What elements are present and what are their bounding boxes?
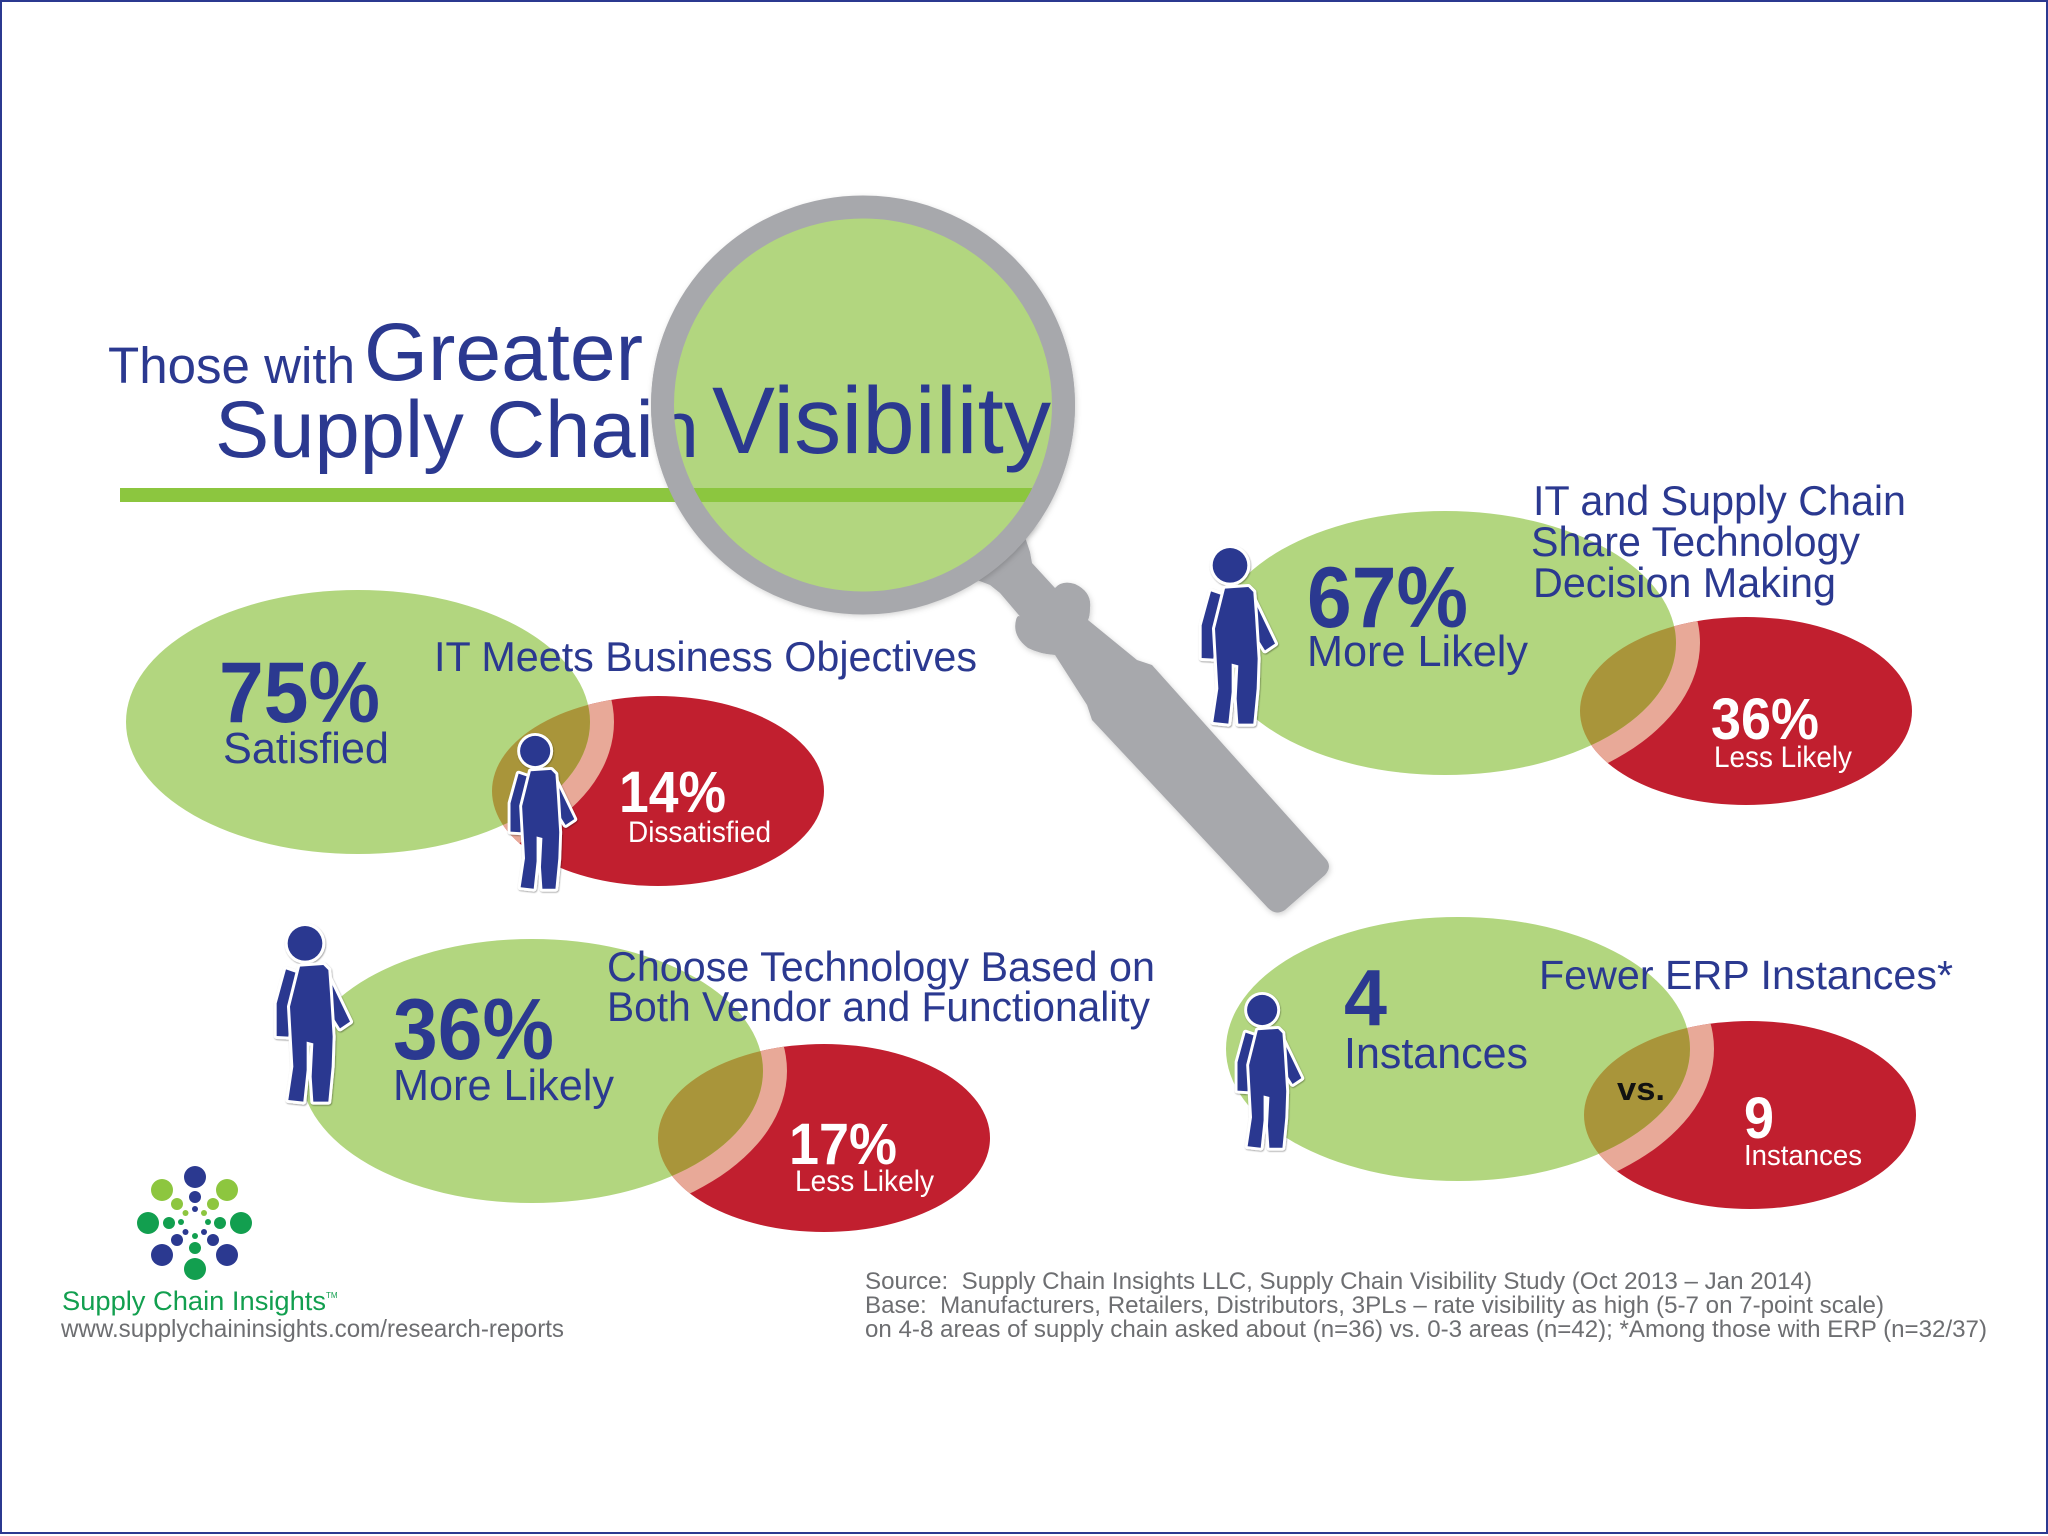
overlap	[1580, 626, 1676, 745]
red ellipse: dissatisfied	[492, 696, 824, 886]
text: IT and supply chain share technology decision making: IT and Supply Chain	[1533, 477, 1906, 524]
title: those with greater supply chain: Those with	[108, 337, 355, 394]
text: IT meets business objectives: Dissatisfied	[628, 816, 771, 849]
text: fewer ERP instances: 9	[1744, 1086, 1774, 1151]
text: choose technology: Both Vendor and Functionality	[607, 983, 1150, 1030]
source note	[865, 1268, 1987, 1343]
magnifying glass body shadow	[651, 196, 1075, 614]
title: visibility: Visibility	[712, 368, 1051, 474]
logo: supply chain insights dots	[137, 1166, 252, 1280]
text: IT and supply chain share technology decision making: Decision Making	[1533, 559, 1836, 606]
red ellipse: less likely	[658, 1044, 990, 1232]
title: those with greater supply chain: Supply Chain	[215, 385, 699, 475]
overlap	[658, 1051, 763, 1176]
pink crescent	[1592, 621, 1700, 763]
magnifying glass handle	[960, 520, 1329, 913]
website url: www.supplychaininsights.com/research-reports	[60, 1315, 564, 1343]
venn: IT and supply chain share decisions	[1234, 511, 1912, 805]
pink crescent	[1599, 1024, 1714, 1172]
text: IT meets business objectives: Satisfied	[223, 724, 389, 773]
text: fewer ERP instances: Fewer ERP Instances*	[1539, 952, 1953, 998]
text: fewer ERP instances: Instances	[1744, 1140, 1862, 1172]
person icon: IT meets business objectives	[510, 736, 574, 889]
text: fewer ERP instances	[1344, 952, 1953, 1172]
green ellipse: satisfied	[126, 590, 590, 854]
source note: on 4-8 areas of supply chain asked about (n=36) vs. 0-3 areas (n=42); *Among those with ERP (n=32/37)	[865, 1316, 1987, 1343]
logo wordmark: Supply Chain Insights	[62, 1286, 326, 1316]
person icon: choose technology	[277, 926, 350, 1102]
green ellipse: more likely	[1214, 511, 1676, 775]
red ellipse: less likely	[1580, 617, 1912, 805]
source note: Base: Manufacturers, Retailers, Distributors, 3PLs – rate visibility as high (5-7 on 7-point scale)	[865, 1292, 1884, 1319]
magnifying glass ring	[662, 207, 1064, 603]
person icon: IT and supply chain	[1202, 548, 1275, 724]
text: IT and supply chain share technology decision making	[1307, 477, 1906, 774]
title: those with greater supply chain: Greater	[364, 307, 643, 398]
text: IT and supply chain share technology decision making: Share Technology	[1531, 518, 1860, 565]
overlap	[1584, 1028, 1690, 1154]
text: IT and supply chain share technology decision making: More Likely	[1307, 627, 1528, 676]
red ellipse: nine instances	[1584, 1021, 1916, 1209]
text: fewer ERP instances: 4	[1344, 953, 1387, 1042]
overlap	[492, 704, 590, 825]
text: IT meets business objectives	[219, 633, 977, 849]
title: those with greater supply chain	[108, 307, 699, 475]
text: choose technology	[393, 943, 1155, 1198]
source note: Source: Supply Chain Insights LLC, Supply Chain Visibility Study (Oct 2013 – Jan 2014)	[865, 1268, 1812, 1295]
text: fewer ERP instances: vs.	[1617, 1071, 1665, 1107]
green ellipse: more likely	[301, 939, 763, 1203]
text: fewer ERP instances: Instances	[1344, 1029, 1528, 1078]
person icon: ERP instances	[1238, 995, 1301, 1148]
text: choose technology: Less Likely	[795, 1165, 934, 1198]
logo wordmark: TM	[326, 1291, 338, 1300]
magnifying glass lens	[668, 210, 1058, 600]
pink crescent	[672, 1046, 787, 1194]
green ellipse: four instances	[1226, 917, 1690, 1181]
text: choose technology: Choose Technology Based on	[607, 943, 1155, 990]
text: choose technology: 17%	[789, 1112, 897, 1177]
title underline	[120, 488, 1032, 502]
text: choose technology: 36%	[393, 982, 554, 1078]
text: IT meets business objectives: IT Meets Business Objectives	[434, 633, 977, 680]
text: IT and supply chain share technology decision making: Less Likely	[1714, 741, 1852, 774]
text: choose technology: More Likely	[393, 1061, 614, 1110]
text: IT and supply chain share technology decision making: 36%	[1711, 687, 1819, 752]
text: IT meets business objectives: 75%	[219, 645, 380, 741]
text: IT and supply chain share technology decision making: 67%	[1307, 550, 1468, 646]
text: IT meets business objectives: 14%	[619, 760, 726, 825]
pink crescent	[503, 700, 614, 843]
venn: choose technology	[306, 939, 990, 1232]
venn: ERP instances	[1226, 917, 1916, 1209]
venn: IT meets business objectives	[126, 590, 824, 886]
